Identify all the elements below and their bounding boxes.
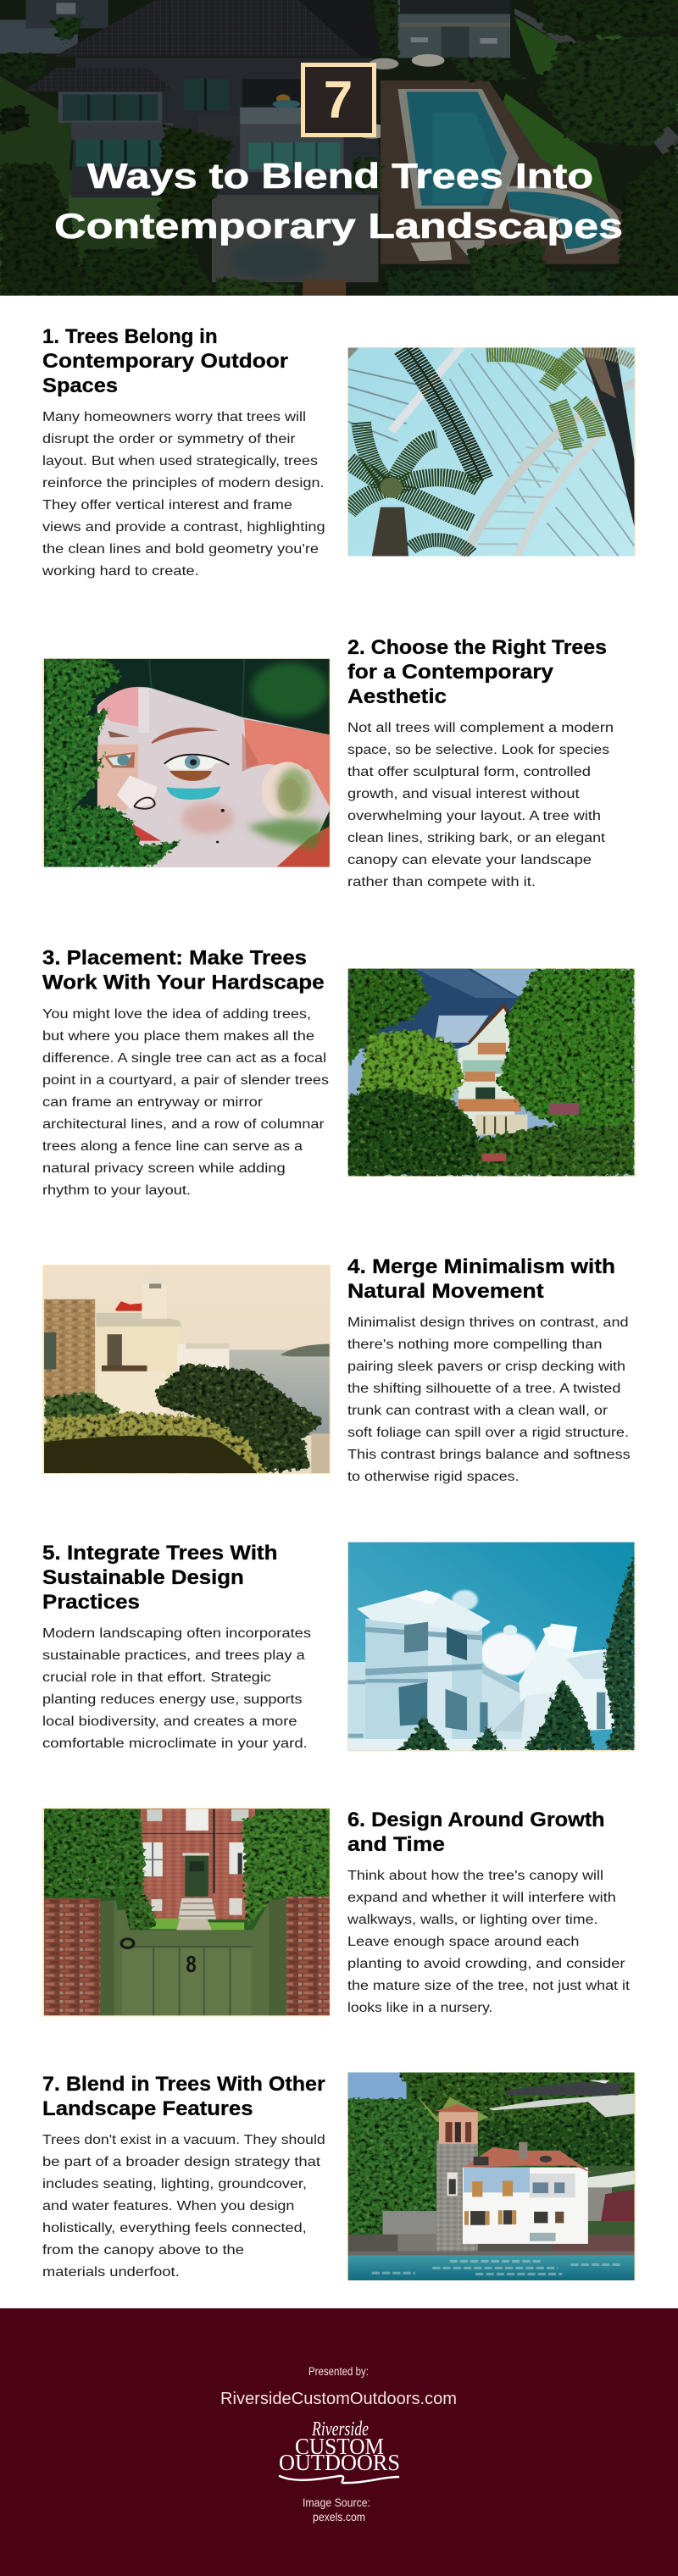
body text 3: natural privacy screen while adding: [42, 1161, 286, 1176]
heading 3: [42, 947, 325, 994]
heading 6: [347, 1809, 605, 1856]
body text 2: [347, 721, 614, 889]
section 6: [42, 1808, 631, 2016]
body text 5: crucial role in that effort. Strategic: [42, 1670, 271, 1685]
heading 7: [42, 2073, 325, 2120]
body text 7: be part of a broader design strategy that: [42, 2155, 321, 2169]
image source label: Image Source:: [303, 2496, 370, 2509]
body text 7: [42, 2133, 325, 2280]
image 6: green garden gate before a brick house: 8: [186, 1952, 197, 1977]
body text 4: Minimalist design thrives on contrast, and: [347, 1316, 629, 1330]
body text 3: difference. A single tree can act as a focal: [42, 1051, 326, 1066]
heading 4: Natural Movement: [347, 1280, 544, 1303]
section 5: [42, 1542, 636, 1752]
image source site: pexels.com: [313, 2511, 365, 2523]
body text 2: growth, and visual interest without: [347, 787, 580, 801]
section 3: [42, 947, 636, 1198]
body text 3: trees along a fence line can serve as a: [42, 1139, 303, 1154]
body text 1: layout. But when used strategically, trees: [42, 454, 318, 468]
heading 4: 4. Merge Minimalism with: [347, 1255, 615, 1278]
body text 2: clean lines, striking bark, or an elegant: [347, 831, 606, 845]
image 4: white villa by the sea: [42, 1265, 331, 1474]
body text 5: [42, 1626, 311, 1751]
heading 5: Practices: [42, 1591, 140, 1614]
heading 1: Contemporary Outdoor: [42, 350, 288, 373]
image 3: alpine house among green trees: [347, 968, 636, 1177]
body text 6: planting to avoid crowding, and consider: [347, 1957, 625, 1971]
body text 5: planting reduces energy use, supports: [42, 1692, 303, 1707]
image 2: mural of a face behind foliage: [42, 658, 331, 867]
body text 2: that offer sculptural form, controlled: [347, 765, 591, 779]
body text 7: and water features. When you design: [42, 2199, 294, 2213]
body text 6: expand and whether it will interfere with: [347, 1891, 616, 1905]
body text 5: comfortable microclimate in your yard.: [42, 1737, 308, 1751]
heading 6: and Time: [347, 1833, 445, 1856]
heading 4: [347, 1255, 615, 1303]
heading 2: 2. Choose the Right Trees: [347, 636, 607, 659]
heading 5: Sustainable Design: [42, 1566, 244, 1589]
image 1: palms and white lattice roof: [347, 346, 638, 557]
body text 4: [347, 1316, 631, 1484]
badge: number 7: [303, 64, 375, 136]
heading 2: for a Contemporary: [347, 661, 554, 684]
image 5: white house against a blue sky: [347, 1542, 636, 1752]
section 4: [42, 1255, 631, 1484]
body text 2: canopy can elevate your landscape: [347, 853, 592, 867]
hero photo: aerial view of house and pool: [0, 0, 678, 296]
body text 6: [347, 1869, 631, 2015]
section 7: [42, 2072, 636, 2280]
heading 3: Work With Your Hardscape: [42, 971, 325, 994]
body text 7: materials underfoot.: [42, 2265, 180, 2280]
body text 4: pairing sleek pavers or crisp decking with: [347, 1360, 625, 1374]
section 2: [42, 636, 614, 889]
body text 3: You might love the idea of adding trees,: [42, 1007, 311, 1022]
heading 6: 6. Design Around Growth: [347, 1809, 605, 1831]
image 7: lakeside villa with stone tower: [347, 2072, 636, 2280]
body text 6: Think about how the tree's canopy will: [347, 1869, 603, 1883]
badge: number 7: 7: [324, 71, 353, 130]
body text 1: They offer vertical interest and frame: [42, 498, 292, 512]
body text 4: the shifting silhouette of a tree. A twisted: [347, 1382, 620, 1396]
body text 3: [42, 1007, 329, 1198]
body text 4: there's nothing more compelling than: [347, 1338, 602, 1352]
heading 7: 7. Blend in Trees With Other: [42, 2073, 325, 2096]
body text 1: Many homeowners worry that trees will: [42, 410, 306, 424]
body text 3: but where you place them makes all the: [42, 1029, 314, 1044]
body text 6: looks like in a nursery.: [347, 2001, 492, 2015]
logo: Riverside Custom Outdoors: [279, 2418, 400, 2483]
heading 1: [42, 325, 288, 397]
body text 6: walkways, walls, or lighting over time.: [347, 1913, 597, 1927]
section 1: [42, 325, 638, 579]
body text 7: holistically, everything feels connected,: [42, 2221, 307, 2235]
heading 5: [42, 1542, 278, 1614]
body text 4: This contrast brings balance and softness: [347, 1448, 631, 1462]
body text 3: architectural lines, and a row of columnar: [42, 1117, 325, 1132]
body text 2: space, so be selective. Look for species: [347, 743, 609, 757]
panel: hero header: [0, 0, 678, 296]
title: Ways to Blend Trees Into: [87, 156, 593, 196]
body text 1: views and provide a contrast, highlighting: [42, 520, 325, 535]
logo: Riverside Custom Outdoors: OUTDOORS: [279, 2450, 400, 2475]
body text 4: trunk can contrast with a clean wall, or: [347, 1404, 608, 1418]
body text 2: rather than compete with it.: [347, 875, 536, 889]
body text 1: the clean lines and bold geometry you're: [42, 542, 319, 557]
body text 4: to otherwise rigid spaces.: [347, 1470, 520, 1484]
body text 2: overwhelming your layout. A tree with: [347, 809, 601, 823]
body text 3: point in a courtyard, a pair of slender trees: [42, 1073, 329, 1088]
body text 3: rhythm to your layout.: [42, 1183, 191, 1198]
body text 4: soft foliage can spill over a rigid structure.: [347, 1426, 629, 1440]
body text 7: from the canopy above to the: [42, 2243, 244, 2257]
heading 1: Spaces: [42, 374, 118, 397]
body text 3: can frame an entryway or mirror: [42, 1095, 263, 1110]
heading 7: Landscape Features: [42, 2097, 253, 2120]
heading 2: [347, 636, 607, 708]
body text 5: local biodiversity, and creates a more: [42, 1715, 297, 1729]
heading 5: 5. Integrate Trees With: [42, 1542, 278, 1565]
body text 5: Modern landscaping often incorporates: [42, 1626, 311, 1641]
heading 2: Aesthetic: [347, 685, 447, 708]
title: [54, 156, 623, 246]
body text 1: disrupt the order or symmetry of their: [42, 432, 295, 446]
logo: Riverside Custom Outdoors: Riverside: [311, 2418, 369, 2440]
title: Contemporary Landscapes: [54, 206, 623, 246]
body text 1: reinforce the principles of modern design.: [42, 476, 325, 490]
body text 7: includes seating, lighting, groundcover,: [42, 2177, 307, 2191]
website address: RiversideCustomOutdoors.com: [220, 2390, 457, 2408]
panel: footer: [0, 2308, 678, 2576]
logo: Riverside Custom Outdoors: CUSTOM: [295, 2434, 384, 2459]
presented by label: Presented by:: [308, 2365, 369, 2378]
heading 3: 3. Placement: Make Trees: [42, 947, 307, 969]
image 6: green garden gate before a brick house: [42, 1808, 331, 2016]
body text 6: the mature size of the tree, not just what it: [347, 1979, 631, 1993]
body text 5: sustainable practices, and trees play a: [42, 1648, 305, 1663]
body text 1: [42, 410, 325, 579]
body text 7: Trees don't exist in a vacuum. They should: [42, 2133, 325, 2147]
heading 1: 1. Trees Belong in: [42, 325, 218, 348]
body text 6: Leave enough space around each: [347, 1935, 580, 1949]
body text 2: Not all trees will complement a modern: [347, 721, 614, 735]
body text 1: working hard to create.: [42, 564, 199, 579]
